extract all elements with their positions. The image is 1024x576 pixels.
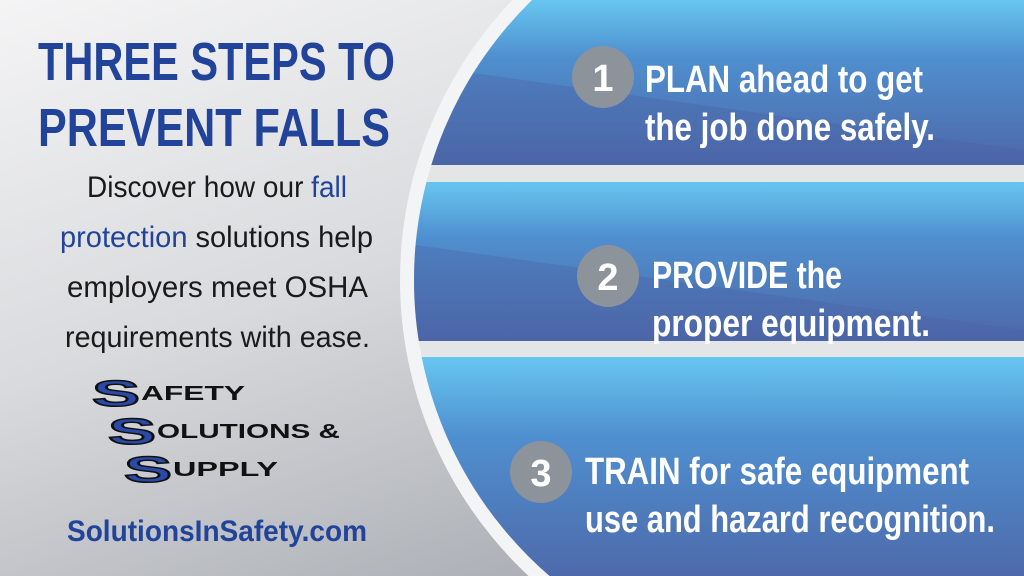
- title: THREE STEPS TO: [38, 32, 395, 92]
- description text: [60, 171, 373, 354]
- step 1: the job done safely.: [645, 107, 935, 149]
- step 1: [572, 46, 935, 149]
- logo: S: [92, 373, 140, 414]
- description text: requirements with ease.: [65, 321, 370, 354]
- step 2: proper equipment.: [652, 303, 930, 345]
- description text: employers meet OSHA: [67, 271, 368, 304]
- step 3: 3: [530, 453, 552, 495]
- step 2: 2: [597, 257, 619, 299]
- description text: protection solutions help: [60, 221, 373, 254]
- description text: Discover how our fall: [87, 171, 347, 204]
- logo: OLUTIONS &: [157, 421, 340, 443]
- band 1: [380, 0, 1024, 165]
- logo: AFETY: [141, 383, 246, 405]
- step 1: PLAN ahead to get: [645, 59, 923, 101]
- white ring: [400, 0, 1024, 576]
- logo: S: [124, 449, 172, 490]
- step 2: [577, 245, 930, 345]
- band 2: [380, 182, 1024, 341]
- logo: [92, 373, 340, 490]
- step 3: [510, 441, 995, 541]
- logo: UPPLY: [173, 459, 279, 481]
- step 2: PROVIDE the: [652, 255, 842, 297]
- website url: SolutionsInSafety.com: [67, 515, 367, 548]
- title: PREVENT FALLS: [38, 98, 390, 158]
- logo: S: [108, 411, 156, 452]
- step 1: 1: [592, 58, 614, 100]
- title: [38, 32, 395, 158]
- band 3: [380, 357, 1024, 576]
